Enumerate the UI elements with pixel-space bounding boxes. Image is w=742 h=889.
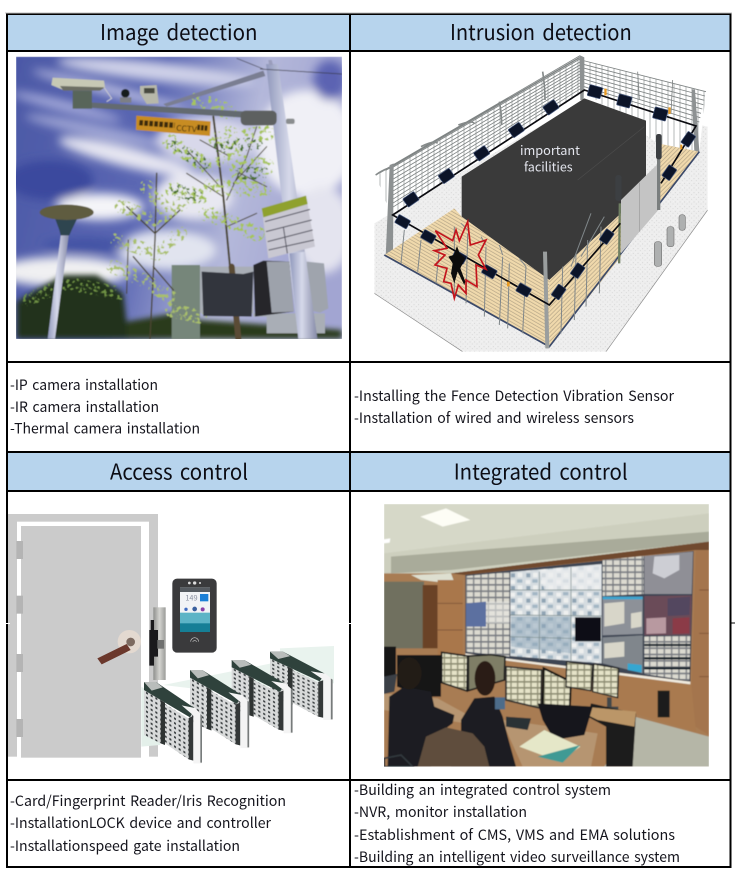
diagram: fenced facility with vibration sensors	[374, 55, 708, 352]
electric strike lock	[149, 607, 166, 680]
heading: access control: Access control	[110, 456, 248, 486]
back-right fence	[579, 55, 706, 203]
door frame and door	[8, 514, 158, 758]
heading: intrusion detection: Intrusion detection	[450, 16, 632, 47]
photo: CCTV pole with cameras against a blue sky	[16, 56, 342, 339]
door handle	[97, 630, 141, 664]
video wall	[465, 551, 694, 684]
gravel ground	[374, 100, 708, 352]
text block: integrated control items	[354, 779, 680, 867]
vibration sensors	[395, 84, 696, 300]
panel: intrusion detection	[350, 14, 730, 352]
speed gates	[141, 646, 334, 763]
tree branches	[127, 117, 267, 339]
wood lower wall and floor	[571, 663, 696, 732]
panel: image detection	[0, 14, 357, 339]
operators	[388, 657, 516, 767]
orange sign	[136, 116, 211, 136]
illustration: door, lock, reader and speed gates	[8, 514, 334, 763]
panel: access control	[7, 452, 350, 763]
text block: integrated control items: -Establishment of CMS, VMS and EMA solutions	[354, 824, 675, 845]
camera arm	[163, 71, 265, 107]
operator monitors	[440, 651, 620, 710]
label: important facilities: facilities	[524, 157, 573, 176]
back-left fence	[376, 56, 584, 257]
bollards	[654, 215, 685, 266]
ceiling	[384, 504, 709, 573]
label: important facilities: important	[520, 140, 580, 159]
intrusion alarm burst	[434, 222, 486, 298]
text block: intrusion detection items: -Installing the Fence Detection Vibration Sensor	[354, 385, 674, 406]
text block: image detection items: -IR camera installation	[10, 396, 159, 417]
text block: access control items	[10, 790, 286, 856]
ground trees	[17, 275, 342, 339]
text block: intrusion detection items: -Installation of wired and wireless sensors	[354, 407, 634, 428]
text block: integrated control items: -Building an integrated control system	[354, 779, 611, 800]
heading: access control	[7, 452, 350, 491]
white notice board	[262, 204, 315, 258]
gate	[621, 163, 658, 253]
foliage	[113, 100, 267, 317]
label: important facilities	[521, 145, 580, 172]
text block: image detection items: -IP camera installation	[10, 374, 158, 395]
text block: integrated control items: -NVR, monitor installation	[354, 801, 527, 822]
panel: integrated control	[350, 452, 730, 767]
heading: image detection	[7, 14, 350, 51]
heading: integrated control	[350, 452, 730, 491]
building	[462, 98, 646, 280]
text block: integrated control items: -Building an intelligent video surveillance system	[354, 846, 680, 867]
biometric reader	[172, 579, 217, 653]
left wall	[384, 582, 424, 648]
text block: image detection items: -Thermal camera installation	[10, 418, 200, 438]
binder	[519, 730, 580, 756]
post at corner	[543, 252, 549, 348]
chair with brown jacket	[418, 727, 489, 767]
orange markers	[507, 89, 682, 286]
left rack and phone	[384, 647, 441, 697]
electrical boxes	[307, 262, 328, 313]
text block: access control items: -Card/Fingerprint Reader/Iris Recognition	[10, 790, 286, 811]
heading: integrated control: Integrated control	[454, 456, 628, 486]
lamp post	[48, 233, 69, 339]
desks	[384, 693, 636, 767]
heading: image detection: Image detection	[100, 16, 258, 47]
sensor cable	[393, 90, 696, 305]
main pole	[266, 64, 317, 339]
heading: intrusion detection	[350, 14, 730, 51]
cameras	[51, 78, 105, 90]
text block: access control items: -InstallationLOCK device and controller	[10, 812, 271, 833]
text block: intrusion detection items	[354, 385, 674, 428]
front fences	[384, 208, 549, 347]
text block: access control items: -Installationspeed gate installation	[10, 835, 240, 856]
text block: image detection items	[10, 374, 200, 438]
intruder figure	[448, 246, 465, 285]
photo: CCTV pole with cameras against a blue sky: CCTV	[176, 123, 198, 135]
biometric reader: 149	[185, 593, 198, 604]
photo: control room with video wall	[384, 504, 709, 767]
